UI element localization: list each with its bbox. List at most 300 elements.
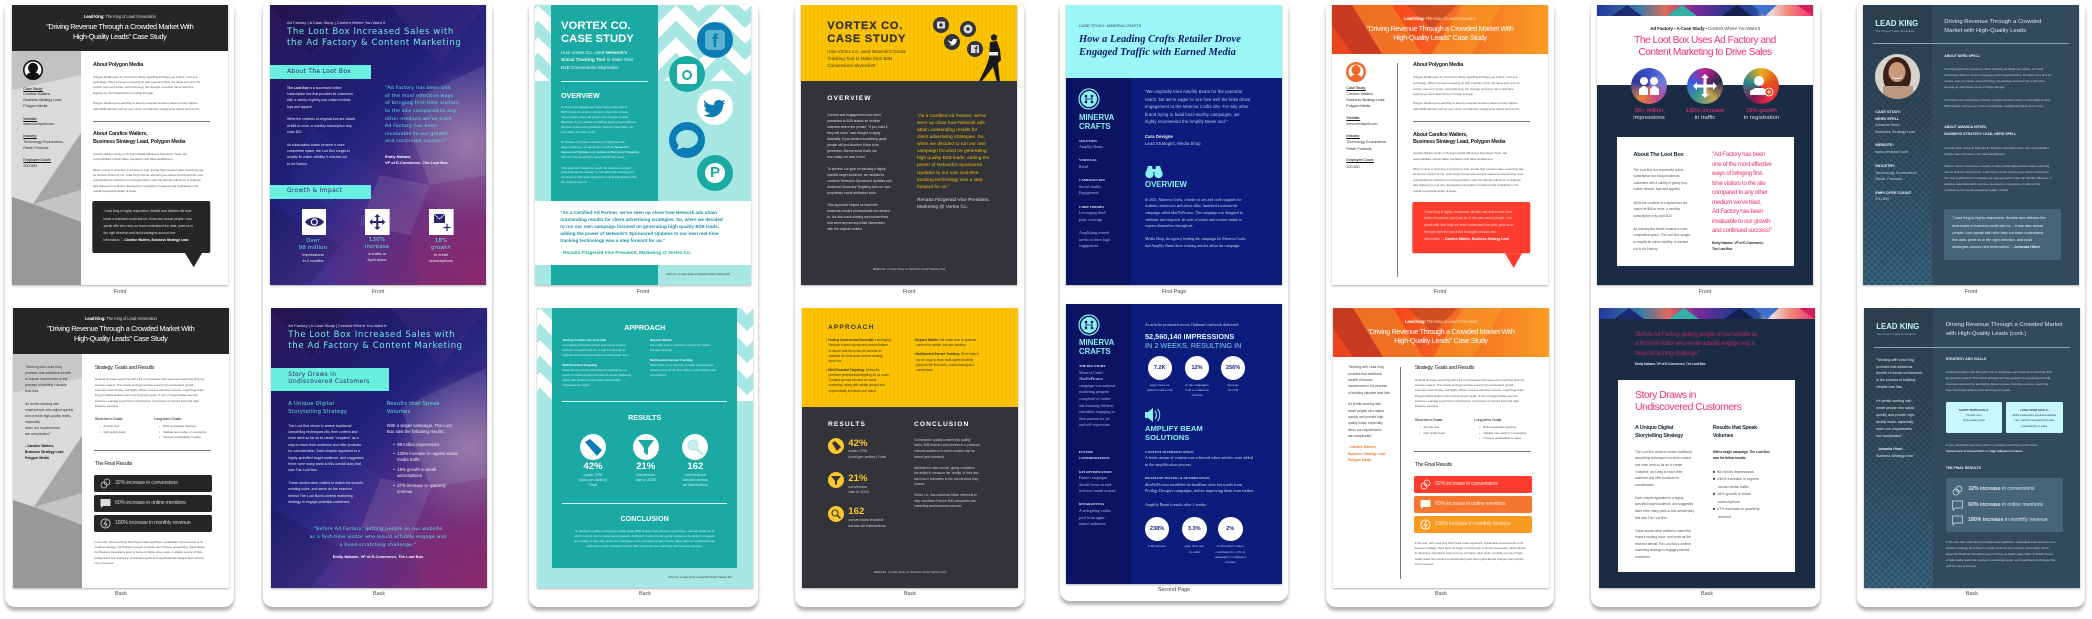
stat: 162 — [848, 506, 886, 528]
sidebar quote: Polygon Media — [25, 456, 49, 460]
text: overview: Basically, if you created something great, — [827, 137, 887, 141]
sidebar quote: in the process of building — [1876, 378, 1915, 382]
quote — [1145, 88, 1250, 126]
orange header — [1333, 308, 1549, 357]
long-term list — [159, 424, 206, 439]
text: conclusion: In the end, with Lead King Nerd Spell made significant, sustainable improvements to its — [1415, 541, 1523, 545]
approach left list: • Testing Content was Essential: Leveraging — [826, 338, 891, 342]
stat: 42% — [848, 438, 886, 459]
text: approach: This approach helped us reach the business-minded — [561, 166, 631, 170]
text: candice: Candice Walters works on Polygon Media's Business Operations Team. Her — [1413, 151, 1507, 155]
results list: • 98 million impressions — [393, 442, 439, 447]
long-term goals text: LONG-TERM GOALS: — [2020, 408, 2049, 412]
quote: "Ad Factory has been one — [385, 86, 451, 91]
quote: a first-time visitor who would actually engage was a — [1635, 341, 1755, 347]
quote: medium we've tried. — [1712, 198, 1761, 206]
text: about nerd spell: technology. When it comes to keeping up with superhero films, the latest story arcs for — [1944, 73, 2051, 77]
quote: when we decided to run our own — [917, 142, 986, 147]
text: choice: an obvious choice for her. Lead King's human element goes above and beyond the most — [1413, 172, 1523, 176]
sidebar quote: benefit of human involvement — [1876, 371, 1922, 375]
quote: client advertising strategies. So, — [917, 135, 985, 140]
stat: traffic — [365, 237, 389, 262]
text: storytelling: The Loot Box chose to weave traditional — [1635, 450, 1692, 454]
second page — [1066, 304, 1282, 584]
stat: 21%: 21% — [636, 461, 655, 472]
short-term goals text: high-quality leads — [1963, 418, 1985, 422]
stat: registration: in registration — [1744, 115, 1779, 121]
result bar 2: 60% increase in online mentions — [1435, 501, 1506, 507]
caption: Back — [1435, 591, 1447, 597]
long-term list: • Increase predictability to sales — [159, 435, 201, 439]
results list: subscriptions — [397, 473, 422, 478]
icon: link — [1952, 484, 1963, 496]
panel: card 4 yellow case study — [795, 0, 1024, 607]
stat labels 5: vs. adult — [1189, 550, 1200, 554]
approach right list: content for mobile, but also desktop. — [916, 343, 967, 347]
website — [23, 116, 54, 126]
text: polygon usage — [93, 101, 200, 111]
text: amanda: Amanda Hitori works on Nerd Spell's Business Operations team. Her responsibilities — [1944, 146, 2049, 150]
text: about: valued at $65 or more, a monthly — [1633, 207, 1680, 211]
panel: card 8 slate blue case study — [1857, 0, 2085, 607]
heading: about: About The Loot Box — [1633, 152, 1684, 158]
heading: about candice: About Candice Walters, — [93, 131, 147, 137]
stat circle 2% — [1218, 517, 1242, 541]
kicker: Lead King: The King of Lead Generation — [84, 14, 156, 19]
sidebar facts: Website: — [1346, 115, 1360, 120]
kicker: Lead King: The King of Lead Generation — [85, 316, 157, 321]
stat: impressions: impressions — [302, 252, 324, 257]
results list: ■ 27% increase to quarterly — [1713, 507, 1760, 511]
stat circle 7.2K — [1148, 356, 1172, 380]
text: storytelling: there were many parts to this overall story that — [288, 462, 361, 466]
approach left: Testing Content was Essential — [562, 338, 606, 342]
stat: traffic: 130% — [369, 237, 385, 243]
callout quote — [1944, 208, 2061, 260]
quote: invaluable to our growth — [1712, 218, 1770, 224]
icon: user plus in mosaic circle — [1743, 68, 1779, 104]
text: results intro: With a single campaign, The Loot — [387, 423, 452, 428]
stat: registration: 18% growth — [1746, 108, 1777, 114]
title: Content Marketing to Drive Sales — [1638, 47, 1772, 58]
sidebar facts — [1346, 85, 1387, 170]
stat: 162: conversions — [685, 472, 706, 477]
stat: impressions: 98+ million — [1635, 108, 1663, 114]
title — [561, 20, 634, 45]
stat: 162 — [665, 461, 725, 487]
title: VORTEX CO. — [561, 20, 631, 32]
long-term goals: Long-term Goals: — [154, 416, 182, 421]
sidebar quote: smart people who adjust — [1876, 406, 1914, 410]
sidebar quote: reliable lead lists. — [1876, 385, 1903, 389]
approach right list: our ad copy to track multi-layered activity — [916, 358, 973, 362]
result 1: 32% increase in conversions — [1968, 486, 2035, 492]
sidebar facts: SOLUTION — [1079, 138, 1097, 142]
approach left list: Network's direct sponsored content feature — [829, 343, 888, 347]
text: choice: data delivered in real-time developing a recognition of patterns that contributes to the — [1413, 183, 1519, 187]
heading: story: Story Draws in — [1635, 389, 1696, 401]
kpi optimization: to-lower funnel actions — [1079, 488, 1116, 493]
text: conclusion: tested (and retested). — [914, 455, 945, 459]
kpi optimization: KPI OPTIMIZATION — [1079, 470, 1112, 474]
heading: overview: OVERVIEW — [827, 95, 872, 102]
text: amanda: include Sales Operations and Sales Enablement. — [1944, 152, 2005, 156]
text: storytelling: Each chapter appealed to a highly- — [1635, 496, 1684, 500]
text: agency — [1145, 236, 1246, 250]
text: choice: sophisticated AI softwares for lead generation make the ultimate difference. It analyzes — [93, 178, 201, 182]
approach left: optimize the best posts before sending them live. — [562, 353, 628, 357]
quote text: speak with who help our team understand the data, point us in — [104, 224, 193, 228]
text: conclusion: which content can be tested (and retested). Attribution is also crucial, giving marketers the ability to measure — [574, 534, 715, 538]
heading: about candice: About Candice Walters, — [1413, 132, 1467, 138]
stat labels 2 — [1172, 383, 1222, 398]
sidebar facts: Retail, Products — [1346, 146, 1371, 151]
text: choice: analyzes data delivered in real-time, developing a recognition of patterns that — [1944, 182, 2040, 186]
text: about: to amplify its online visibility. It reached — [1633, 240, 1688, 244]
stat labels 6: contributed to 1.4% of — [1215, 550, 1245, 554]
text: amanda — [1944, 144, 2049, 156]
kpi optimization: should focus on mid- — [1079, 482, 1112, 487]
heading: strategy: Strategy, Goals and Results — [1415, 365, 1474, 371]
long-term goals text: Build sustainable pipelines/validate — [2013, 413, 2056, 417]
title: How a Leading Crafts Retailer Drove — [1079, 34, 1241, 45]
caption: Front — [1434, 289, 1446, 295]
text: overview: proprietary social attribution tools. — [827, 191, 877, 195]
panel: card 7 pink and navy case study — [1591, 0, 1820, 607]
stat circle 3.3% — [1182, 517, 1206, 541]
front page — [12, 5, 228, 284]
attribution: Emily Nakane, VP of E-Commerce, The Loot Box — [1635, 362, 1705, 366]
heading: results: RESULTS — [828, 421, 866, 428]
text: about nerd spell — [1944, 66, 2051, 90]
text: storytelling: there were many parts to this overall story — [1635, 509, 1694, 513]
quote: "Ad Factory has been — [1712, 151, 1765, 158]
quote text: speak with who help our team understand the data, point us in — [1424, 223, 1513, 227]
text: agency: had Amplify Beam drive existing articles about the campaign. — [1145, 244, 1240, 248]
text: about polygon: comics, new sci-fi series, and technology, the average consumer has a hard time — [93, 85, 193, 89]
icon: avatar — [23, 60, 43, 80]
quote — [560, 208, 723, 244]
quote text: the data, point us in the right direction, and build — [1952, 238, 2032, 242]
results list: • 130% increase in organic social — [393, 451, 458, 456]
results list — [393, 442, 458, 495]
subheading left: A Unique Digital — [288, 401, 334, 407]
sidebar quote: provides that additional — [1348, 372, 1382, 376]
quote text: information." - Candice Walters, Business Strategy Lead — [1424, 236, 1509, 240]
text: about polygon: technology. When it comes to keeping up with superhero films, the latest story arcs for — [93, 80, 200, 84]
text: storytelling: essence behind The Loot Box's content — [1635, 542, 1691, 546]
quote text: the right direction and build strategies around new — [104, 231, 175, 235]
text: strategy — [1415, 378, 1524, 410]
subtitle: How Vortex Co. used Network's Social — [827, 49, 906, 54]
front page — [1863, 5, 2078, 284]
result bar 1 — [1414, 476, 1532, 492]
headline testing — [1145, 475, 1254, 495]
sidebar — [1066, 304, 1131, 584]
text: strategy: metrics to evaluate Lead King's performance: Conversions to Closed Deal and High- — [1415, 399, 1520, 403]
front page — [535, 5, 750, 284]
icon: chat — [1952, 500, 1963, 511]
subtitle: Conversions Skyrocket! — [827, 63, 876, 68]
title: Driving Revenue Through a Crowded Market — [1946, 322, 2062, 328]
heading: about polygon: About Polygon Media — [1413, 62, 1463, 68]
text: candice: Candice Walters works on Polygon Media's Business Operations Team. Her — [93, 152, 187, 156]
front page — [801, 5, 1016, 284]
caption: Back — [115, 591, 127, 597]
retargeting: pool from upper- — [1079, 515, 1106, 520]
quote — [917, 113, 990, 191]
approach left list: premium professional targeting let us reach — [829, 373, 889, 377]
text: about polygon: keeping up. Nerd Spell strives to bridge that gap. — [1413, 92, 1474, 96]
text: conclusion: marketing and business success. — [914, 504, 962, 508]
section bar: growth — [270, 185, 371, 199]
stat circle 12%: 12% — [1191, 364, 1203, 370]
sidebar facts — [1875, 109, 1918, 203]
retargeting: RETARGETING — [1079, 502, 1104, 506]
industry: Technology, Ecommerce, — [23, 139, 64, 144]
text: strategy: Polygon Media achieve short and long-term goals. In turn, Polygon Media uses two — [95, 393, 198, 397]
result bar 1: 32% increase in conversions — [1435, 480, 1498, 486]
approach right: but also desktop. — [650, 348, 673, 352]
attribution: Renatta Fitzgerald Vice President, — [917, 198, 990, 203]
quote: "As a Certified Ad Partner, we've — [917, 114, 986, 119]
employee count: 200-500 — [23, 163, 37, 168]
retargeting: funnel audiences — [1079, 521, 1106, 526]
approach right list: conversions. — [916, 368, 934, 372]
text: choice — [93, 168, 204, 193]
title — [286, 27, 461, 48]
sidebar facts: Leveraging third- — [1079, 210, 1107, 215]
text: storytelling: for consideration. Each chapter appealed to a — [288, 449, 360, 453]
kicker: Ad Factory | A Case Study | Content Where You Want It — [287, 20, 385, 25]
sidebar facts: media to drive high — [1079, 237, 1110, 242]
sidebar facts: Retail — [1079, 164, 1088, 169]
text: polygon usage: Polygon Media used Lead King to identify essential decision makers in their highest- — [93, 101, 198, 105]
title: The Loot Box Increased Sales with — [288, 330, 455, 340]
panel: card 3 teal case study — [529, 0, 758, 607]
text: metrics — [1946, 442, 2038, 454]
icon: arrows — [365, 209, 390, 235]
text: usage: Nerd Spell used Lead King to identify essential decision makers in their highest-value — [1944, 98, 2050, 102]
text: storytelling: consideration. — [1635, 483, 1655, 487]
heading: solutions: AMPLIFY BEAM — [1145, 424, 1203, 433]
caption: Second Page — [1158, 587, 1190, 593]
icon: chat — [1952, 515, 1963, 526]
first page — [1066, 5, 1282, 284]
title: CASE STUDY — [827, 33, 906, 45]
text: overview: Content and engagement have been presented to — [561, 105, 627, 109]
title — [1946, 321, 2062, 338]
subtitle: How Vortex Co. used Network's — [561, 50, 627, 55]
text: about: competitive space, the Loot Box sought to — [287, 149, 350, 153]
stat: traffic: 130% increase — [1686, 108, 1724, 114]
sidebar quote: process of building valuable — [25, 383, 67, 387]
teal column — [552, 308, 737, 568]
text: strategy: Amanda provides Lead King with a list of companies each week and Lead King finds — [1946, 370, 2052, 374]
quote text — [104, 209, 193, 242]
quote: invaluable to our growth — [385, 132, 448, 137]
sidebar quote: quickly and provide high — [1348, 415, 1383, 419]
text: storytelling: brand's existing voice, and serve as the — [1635, 535, 1691, 539]
sidebar quote: when our requirements — [1876, 427, 1912, 431]
stat circle 238% — [1145, 517, 1169, 541]
text: about: The Loot Box is a successful online — [1633, 168, 1683, 172]
text: results intro — [1713, 449, 1770, 462]
kicker: Lead King: The King of Lead Generation — [1404, 16, 1476, 21]
sidebar quote: - Candice Walters, — [25, 444, 54, 448]
employee count: Employee Count: — [23, 157, 51, 162]
sidebar facts: party coverage — [1079, 217, 1102, 222]
sidebar quote: Business Strategy Lead — [1348, 452, 1385, 456]
stat: impressions — [1619, 108, 1679, 122]
approach right: Beyond Mobile — [650, 338, 672, 342]
text: choice: When it came to choosing a company to help provide high-precision data, Lead King was — [1413, 167, 1524, 171]
text: conclusion: help countless Fortune 500 companies see — [914, 499, 976, 503]
title: CASE STUDY — [561, 33, 634, 45]
stat labels 2: revenue — [1192, 393, 1202, 397]
text: conclusion: In the end, with Lead King Nerd Spell made significant, sustainable improvements to its — [1946, 540, 2055, 544]
future considerations: CONSIDERATIONS — [1079, 456, 1110, 460]
sidebar facts: Retail, Products — [1875, 177, 1902, 181]
stat circle 7.2K: 7.2K — [1154, 364, 1166, 370]
sidebar facts: NERD SPELL — [1875, 117, 1899, 121]
back page — [1864, 308, 2080, 588]
short-term list — [100, 424, 126, 434]
approach right — [650, 338, 716, 378]
title: High-Quality Leads" Case Study — [1394, 336, 1488, 345]
brand name — [1079, 338, 1114, 356]
text: metrics: Conversions to Closed Deal and High-Influence Contacts. — [1946, 449, 2023, 453]
sidebar facts — [1079, 138, 1110, 250]
text: conclusion: In the end, with Lead King Nerd Spell made significant, sustainable improvements to its — [94, 540, 203, 544]
sidebar quote — [25, 365, 73, 460]
front page — [270, 5, 486, 284]
sidebar quote: are complicated." — [1348, 434, 1373, 438]
text: choice — [1413, 167, 1524, 194]
headline testing: #ImNoPicasso modelled its headlines after keywords from — [1145, 482, 1242, 487]
brand name: CRAFTS — [1079, 347, 1111, 356]
section heading: growth: Growth & Impact — [287, 188, 342, 194]
quote: one of the most effective — [1712, 160, 1772, 168]
text: choice — [1944, 163, 2052, 193]
text: overview: "if you build it, they will come" was thought to apply. — [561, 115, 629, 119]
sidebar quote: especially — [25, 420, 40, 424]
text: overview: that went beyond any initial interactions — [827, 221, 885, 225]
text: conclusion: and how it translates to the conversions they — [914, 477, 978, 481]
stat circle 12% — [1185, 356, 1209, 380]
approach left: Network's premium professional targeting let us — [562, 368, 626, 372]
subheading left — [1635, 424, 1683, 440]
text: overview: they will come" was thought to apply. — [827, 131, 881, 135]
approach left list: • Well-Rounded Targeting: Network's — [826, 368, 880, 372]
icon: button logo — [1078, 88, 1100, 110]
chevron background — [537, 308, 753, 401]
heading: final results: THE FINAL RESULTS — [1946, 466, 1981, 470]
text: conclusion — [1946, 539, 2055, 569]
text: results intro — [387, 423, 452, 436]
title: Engaged Traffic with Earned Media — [1079, 47, 1236, 58]
sidebar quote: provides that additional — [1876, 364, 1912, 368]
footer: Vortex Co. | A Case Study on Network's Social Tracking Tool — [874, 571, 946, 574]
sidebar facts: Technology, Ecommerce, — [1346, 139, 1387, 144]
quote: Ad Factory has been — [385, 124, 437, 129]
yellow header — [802, 308, 1018, 407]
stat: email: 18% — [435, 238, 447, 244]
sidebar facts: VERTICAL — [1079, 158, 1097, 162]
long-term list: • Build sustainable pipelines — [159, 424, 196, 428]
quote text: "Lead King is highly responsive, flexible and delivers the best — [1424, 210, 1512, 214]
sidebar quote: smart people who adjust quickly — [25, 408, 73, 412]
mosaic strip — [1597, 5, 1813, 16]
stat: 21%: rate in 2020 — [848, 489, 869, 494]
result bar 2 — [94, 495, 212, 512]
headline metric: 52,560,140 IMPRESSIONS — [1145, 332, 1234, 341]
short-term list: • high-quality leads — [100, 430, 126, 434]
stat circle 256% — [1221, 356, 1245, 380]
stat: impressions — [299, 238, 327, 262]
sidebar quote: and provide high-quality leads, — [25, 414, 71, 418]
brand name — [1079, 113, 1114, 131]
big story: and adults engaging in — [1079, 409, 1115, 414]
text: conclusion — [1415, 541, 1525, 567]
quote: seen up close how Network ads — [917, 121, 985, 126]
text: overview: to, but also track sharing and conversions — [827, 215, 888, 219]
stat: traffic: increase — [365, 244, 389, 250]
sidebar facts: Case Study: — [23, 86, 43, 90]
content diversification: CONTENT DIVERSIFICATION — [1145, 450, 1193, 454]
heading: solutions: SOLUTIONS — [1145, 433, 1189, 442]
quote: of the most effective ways — [385, 94, 453, 99]
text: overview: campaign called #ImNoPicasso. The campaign was designed to — [1145, 211, 1243, 215]
stat circle 2%: 2% — [1226, 526, 1234, 532]
result bar 3 — [1414, 516, 1532, 533]
quote: "Before Ad Factory, getting people on our website as — [1635, 332, 1758, 338]
approach left: Leveraging Network's direct sponsored content — [562, 343, 626, 347]
sidebar facts: Polygon Media — [1346, 103, 1370, 108]
approach left — [562, 338, 632, 388]
heading: final results: The Final Results — [95, 461, 132, 467]
white content box — [1618, 380, 1795, 572]
text: strategy: corporate restructuring, and highly efficient process that drive revenue. Lead King — [1946, 382, 2048, 386]
big story — [1079, 363, 1115, 429]
subheading right: Volumes — [387, 409, 410, 415]
quote: "As a Certified Ad Partner, we've seen up close how Network ads attain — [560, 210, 717, 214]
icon: people in mosaic circle — [1631, 68, 1667, 104]
text: storytelling: and even went so far as to create — [1635, 463, 1682, 467]
back page — [1333, 308, 1548, 588]
icon: pinterest — [697, 154, 733, 190]
section heading: about: About The Loot Box — [287, 69, 351, 75]
text: storytelling: marketing strategy to engage potential — [1635, 548, 1689, 552]
website: www.nerdspell.com — [23, 121, 54, 126]
text: conclusion: business strategy. Nerd Spell no longer conducts any in-house prospecting, which — [1946, 546, 2049, 550]
front page — [1332, 5, 1548, 284]
text: about: As subscription boxes became a more — [1633, 227, 1687, 231]
content diversification — [1145, 449, 1253, 469]
sidebar geometric background — [12, 51, 81, 285]
text: results intro: Box saw the following results: — [387, 429, 444, 434]
stat: 42%: under CPA — [584, 472, 602, 477]
stat labels 3: in CTR — [1228, 388, 1238, 392]
subheading left: Storytelling Strategy — [1635, 433, 1683, 439]
employee count — [23, 157, 51, 168]
text: strategy: Influence Contacts. — [95, 404, 119, 408]
stat: 42%: (cost-per-action) — [579, 477, 607, 482]
text: conclusion: the Business Operations team to focus on higher-value tasks. A reliable source of high- — [1415, 551, 1523, 555]
text: agency: Media Shop, the agency leading the campaign for Minerva Crafts — [1145, 237, 1246, 241]
text: choice: overall exceptional quality of leads. — [93, 189, 137, 193]
heading: approach: APPROACH — [828, 324, 875, 331]
